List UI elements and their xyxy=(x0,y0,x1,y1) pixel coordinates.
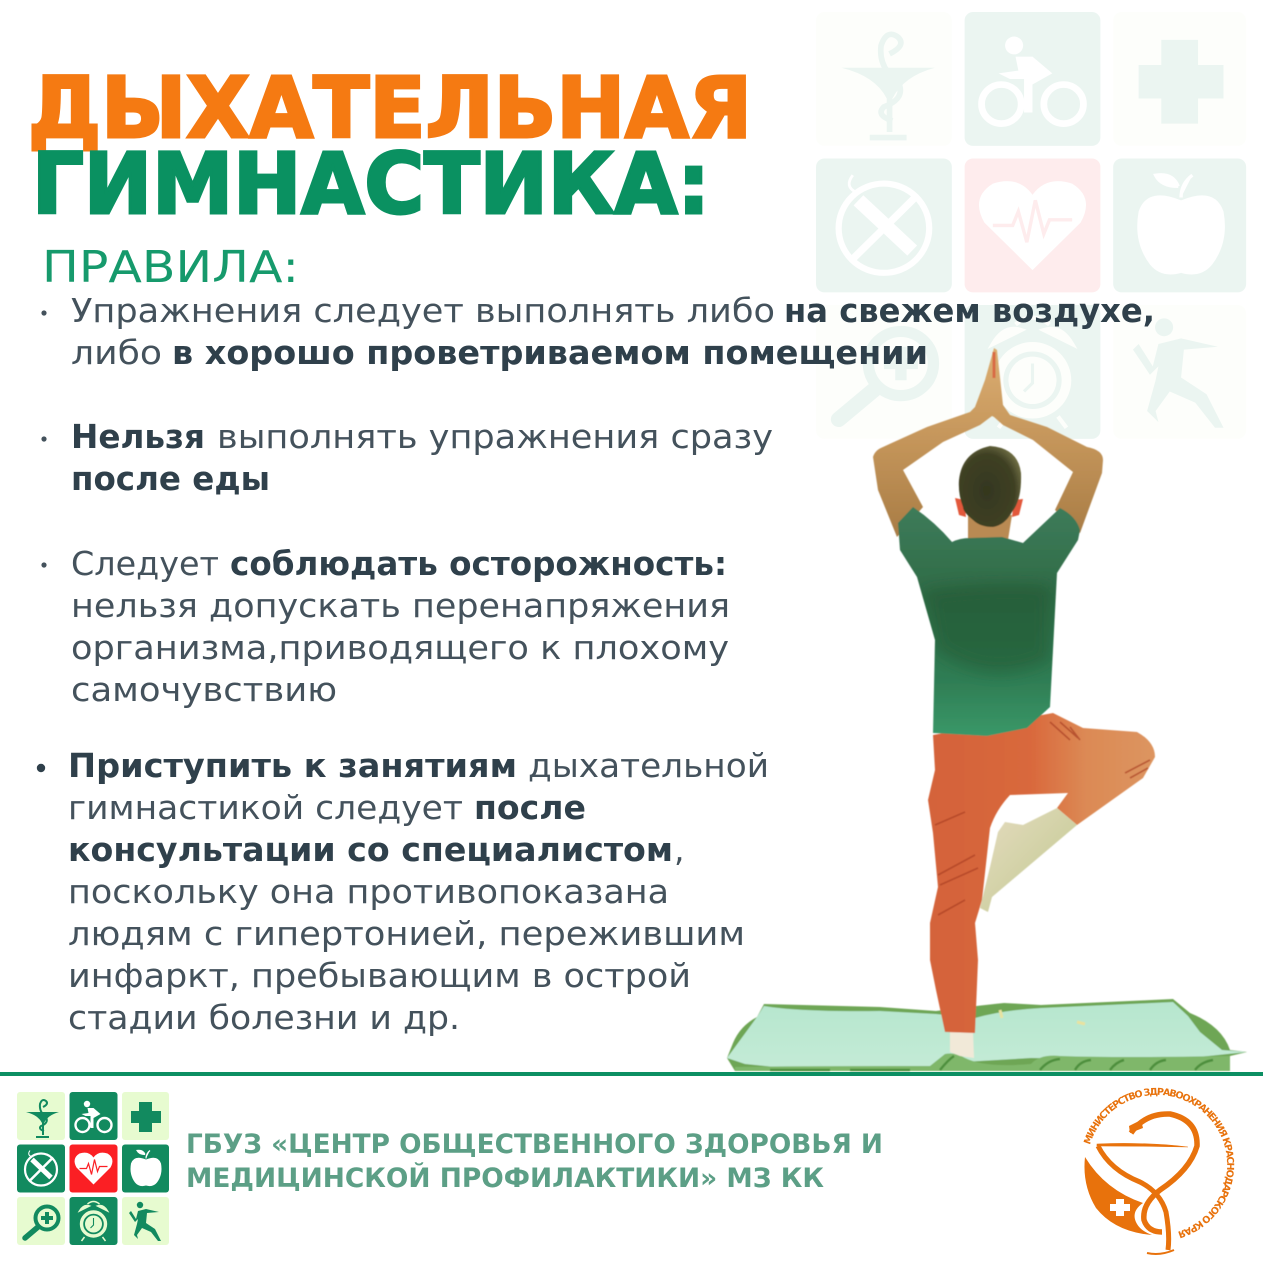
logo: snake xyxy=(1131,1114,1197,1232)
rule 4: consult a specialist: консультации со специалистом xyxy=(68,830,673,869)
neck and ears xyxy=(955,498,1023,541)
head: hair xyxy=(959,446,1021,527)
logo: bowl rim xyxy=(1097,1143,1188,1147)
footer divider line xyxy=(0,1072,1263,1076)
icon: no smoking xyxy=(17,1144,65,1192)
organization name xyxy=(186,1129,883,1194)
icon: alarm clock xyxy=(70,1197,118,1245)
rule 4: consult a specialist: поскольку она противопоказана xyxy=(68,872,669,911)
rule 4: consult a specialist: после xyxy=(474,788,586,827)
logo: circular text: МИНИСТЕРСТВО ЗДРАВООХРАНЕНИЯ КРАСНОДАРСКОГО КРАЯ xyxy=(1084,1088,1234,1238)
icon: bowl of Hygieia xyxy=(17,1092,65,1140)
rule 2: not after meals xyxy=(41,417,773,498)
illustration: man in tree pose on mat xyxy=(727,348,1247,1071)
organization name: МЕДИЦИНСКОЙ ПРОФИЛАКТИКИ» МЗ КК xyxy=(186,1162,824,1194)
logo: stem and base xyxy=(1098,1146,1169,1250)
organization name: ГБУЗ «ЦЕНТР ОБЩЕСТВЕННОГО ЗДОРОВЬЯ И xyxy=(186,1129,883,1160)
rule 1: fresh air: на свежем воздухе, xyxy=(784,291,1155,330)
icon: cyclist xyxy=(70,1092,118,1140)
rule 2: not after meals: Нельзя xyxy=(71,417,205,456)
yoga mat on grass xyxy=(727,999,1247,1071)
rule 4: consult a specialist: дыхательной xyxy=(528,746,769,785)
rule 3: caution: Следует xyxy=(71,544,219,583)
palm line xyxy=(992,352,996,378)
rule 2: not after meals: после еды xyxy=(71,459,270,498)
trousers xyxy=(928,713,1155,1033)
rule 3: caution xyxy=(41,544,730,709)
arms and hands xyxy=(873,348,1103,537)
icon: magnifying glass xyxy=(17,1197,65,1245)
rule 4: consult a specialist: стадии болезни и др. xyxy=(68,998,460,1037)
logo: white cross xyxy=(1110,1199,1130,1216)
rule 3: caution: самочувствию xyxy=(71,670,337,709)
ministry logo xyxy=(1084,1088,1234,1255)
logo: bowl swoosh xyxy=(1084,1157,1152,1235)
rule 1: fresh air: в хорошо проветриваемом помещении xyxy=(172,333,928,372)
rule 4: consult a specialist: инфаркт, пребывающим в острой xyxy=(68,956,691,995)
rule 3: caution: нельзя допускать перенапряжения xyxy=(71,586,730,625)
icon: runner xyxy=(122,1197,169,1245)
rule 4: consult a specialist: людям с гипертонией, пережившим xyxy=(68,914,745,953)
rule 3: caution: соблюдать осторожность: xyxy=(230,544,727,583)
standing foot xyxy=(950,1030,974,1058)
footer icon grid xyxy=(17,1092,169,1245)
title: ДЫХАТЕЛЬНАЯ xyxy=(28,59,752,157)
title: ГИМНАСТИКА: xyxy=(32,135,710,233)
icon: medical cross xyxy=(122,1092,169,1140)
rule 4: consult a specialist: гимнастикой следует xyxy=(68,788,463,827)
icon: heart with pulse xyxy=(70,1144,118,1192)
rule 3: caution: организма,приводящего к плохому xyxy=(71,628,729,667)
icon: apple xyxy=(122,1144,169,1192)
title xyxy=(28,59,752,233)
heading: rules: ПРАВИЛА: xyxy=(42,242,299,293)
rule 4: consult a specialist xyxy=(37,746,769,1037)
rule 2: not after meals: выполнять упражнения сразу xyxy=(217,417,773,456)
background icon grid watermark xyxy=(816,12,1246,439)
raised foot xyxy=(980,808,1077,912)
rule 4: consult a specialist: Приступить к занятиям xyxy=(68,746,517,785)
rule 1: fresh air: Упражнения следует выполнять либо xyxy=(71,291,775,330)
rule 1: fresh air xyxy=(41,291,1155,372)
rule 1: fresh air: либо xyxy=(71,333,162,372)
rule 4: consult a specialist: , xyxy=(674,830,684,869)
T-shirt xyxy=(898,506,1080,736)
